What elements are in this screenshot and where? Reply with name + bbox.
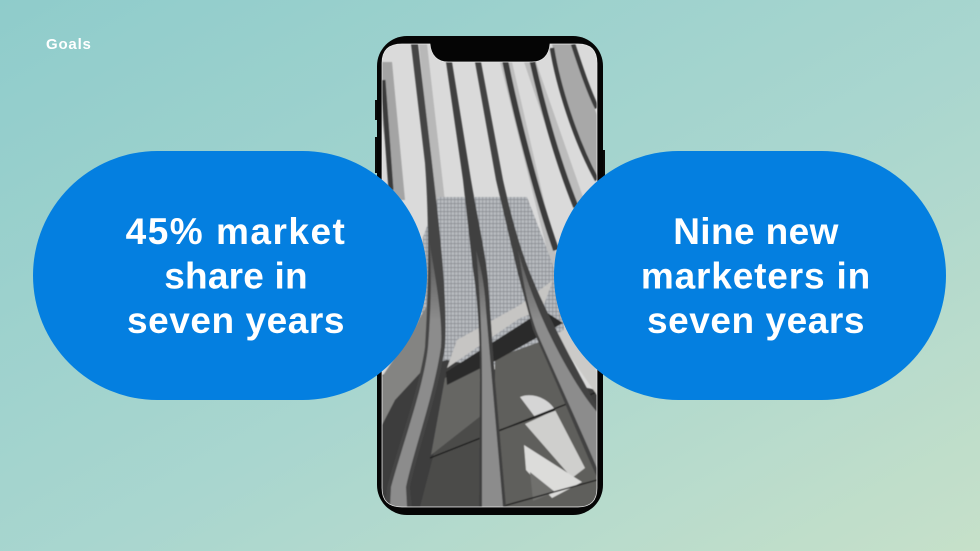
screen edge highlight bbox=[382, 44, 597, 507]
right light panel bbox=[558, 328, 597, 396]
phone side buttons bbox=[375, 100, 605, 190]
lower base bbox=[382, 360, 597, 507]
right pill text: Nine new bbox=[673, 211, 839, 252]
right pill text: marketers in bbox=[641, 256, 871, 296]
stripe and pipe: right bbox=[475, 62, 597, 477]
arch reflection bbox=[520, 395, 555, 417]
stripe and pipe: centre bbox=[446, 62, 506, 507]
phone body bbox=[377, 36, 603, 515]
left pill text: seven years bbox=[127, 300, 345, 341]
shaded panels bbox=[382, 62, 405, 200]
right pill text: seven years bbox=[647, 300, 865, 341]
stripe and pipe: left bbox=[398, 44, 446, 484]
heading: Goals: Goals bbox=[46, 36, 92, 53]
white reflected beams bbox=[525, 410, 585, 478]
dark band below beam bbox=[446, 310, 563, 385]
left pill text: share in bbox=[164, 256, 308, 296]
glass frames bbox=[430, 392, 597, 507]
left goal pill bbox=[33, 151, 427, 400]
light diagonal beam bbox=[447, 280, 553, 368]
lower left wedge bbox=[382, 307, 428, 425]
right goal pill bbox=[554, 151, 946, 400]
building facade bbox=[418, 196, 564, 366]
thin stripes bbox=[383, 44, 597, 250]
glass between centre and right pipes bbox=[495, 340, 597, 507]
phone bbox=[375, 36, 605, 515]
phone screen photo bbox=[380, 40, 600, 510]
left pill text: 45% market bbox=[126, 211, 346, 252]
glass between left and centre pipes bbox=[420, 418, 480, 506]
